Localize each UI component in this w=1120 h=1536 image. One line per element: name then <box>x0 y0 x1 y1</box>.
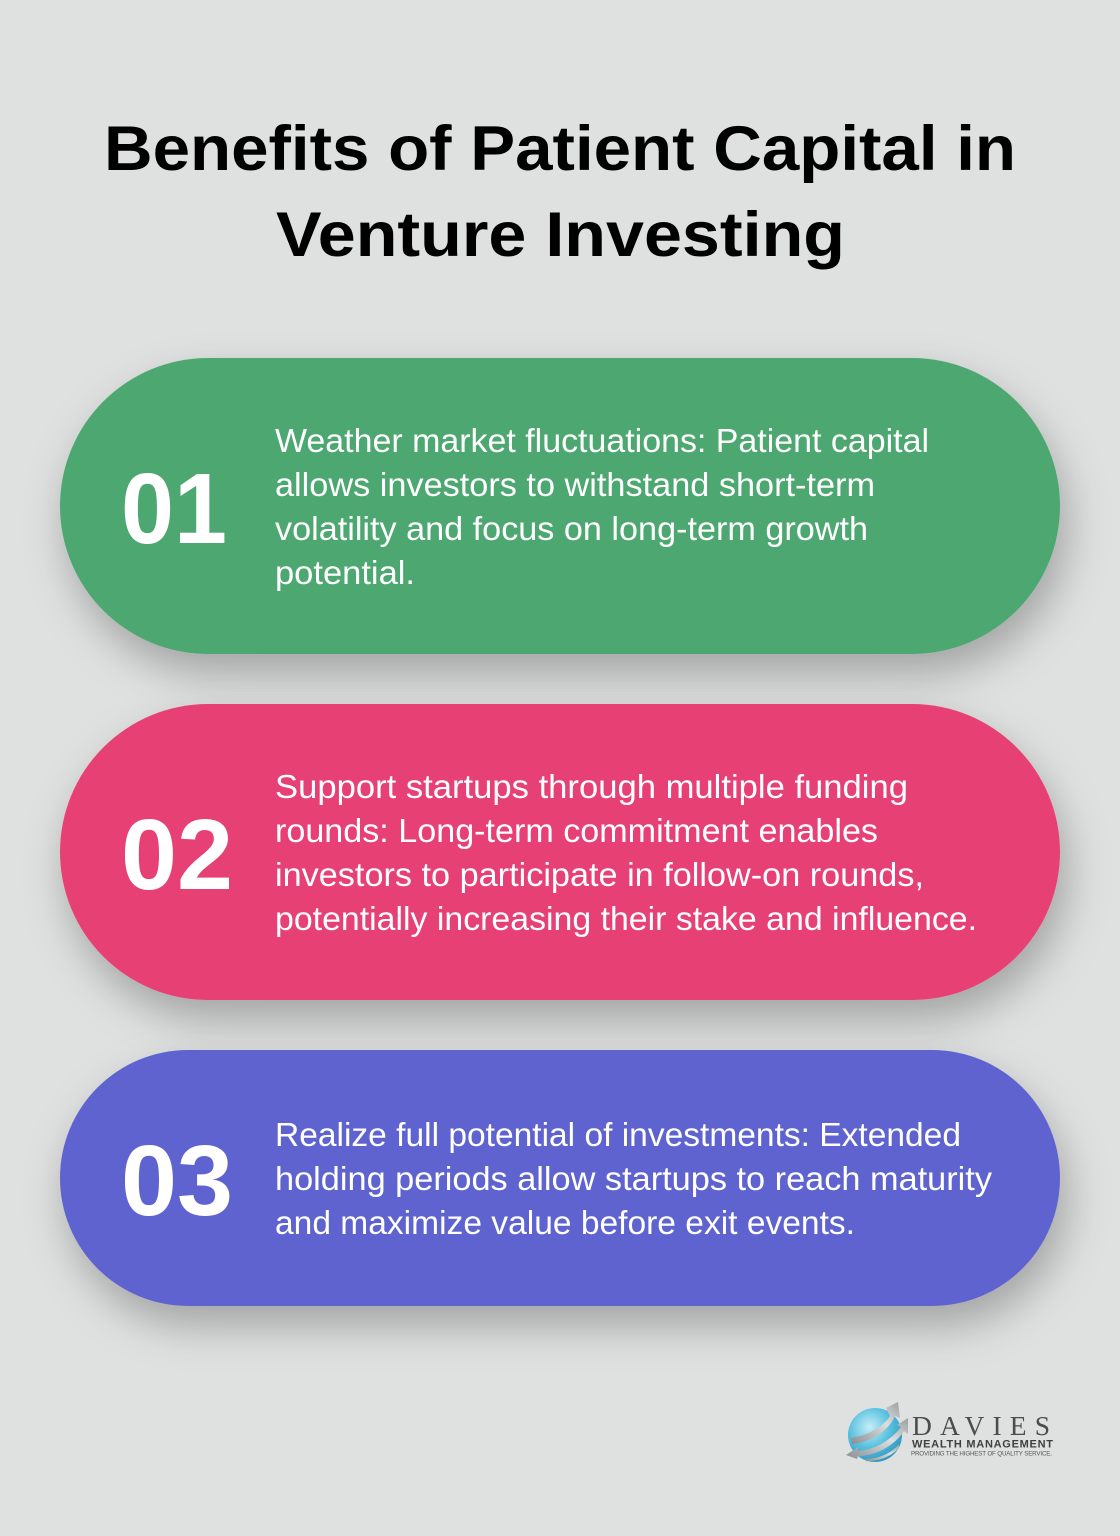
text: support startups <box>275 768 977 937</box>
title: Venture Investing <box>276 200 845 270</box>
panel: benefit 02 <box>60 704 1060 1000</box>
text: support startups: potentially increasing their stake and influence. <box>275 900 977 937</box>
text: realize full potential: and maximize value before exit events. <box>275 1204 855 1241</box>
panel: benefit 03 <box>60 1050 1060 1306</box>
panel background: indigo pill <box>60 1050 1060 1306</box>
text: weather market fluctuations: allows investors to withstand short-term <box>275 466 875 503</box>
text: weather market fluctuations: potential. <box>275 554 415 591</box>
number 02: 02 <box>121 799 233 911</box>
text: support startups: rounds: Long-term commitment enables <box>275 812 878 849</box>
text: realize full potential <box>275 1116 993 1241</box>
text: support startups: investors to participate in follow-on rounds, <box>275 856 924 893</box>
icon: globe with arrows <box>846 1402 908 1462</box>
logo: Davies Wealth Management <box>846 1402 1053 1462</box>
panel background: green pill <box>60 358 1060 654</box>
title <box>104 114 1016 270</box>
number 03: 03 <box>121 1125 233 1237</box>
text: realize full potential: holding periods allow startups to reach maturity <box>275 1160 993 1197</box>
text: weather market fluctuations: volatility and focus on long-term growth <box>275 510 868 547</box>
logo wordmark: DAVIES <box>912 1410 1050 1441</box>
text: weather market fluctuations <box>275 422 929 591</box>
text: weather market fluctuations: Weather market fluctuations: Patient capital <box>275 422 929 459</box>
panel: benefit 01 <box>60 358 1060 654</box>
text: support startups: Support startups through multiple funding <box>275 768 908 805</box>
number 01: 01 <box>121 453 227 565</box>
panel background: pink pill <box>60 704 1060 1000</box>
logo subtitle: WEALTH MANAGEMENT <box>912 1438 1053 1450</box>
text: realize full potential: Realize full potential of investments: Extended <box>275 1116 961 1153</box>
logo tagline: PROVIDING THE HIGHEST OF QUALITY SERVICE. <box>911 1450 1052 1458</box>
title: Benefits of Patient Capital in <box>104 114 1016 184</box>
